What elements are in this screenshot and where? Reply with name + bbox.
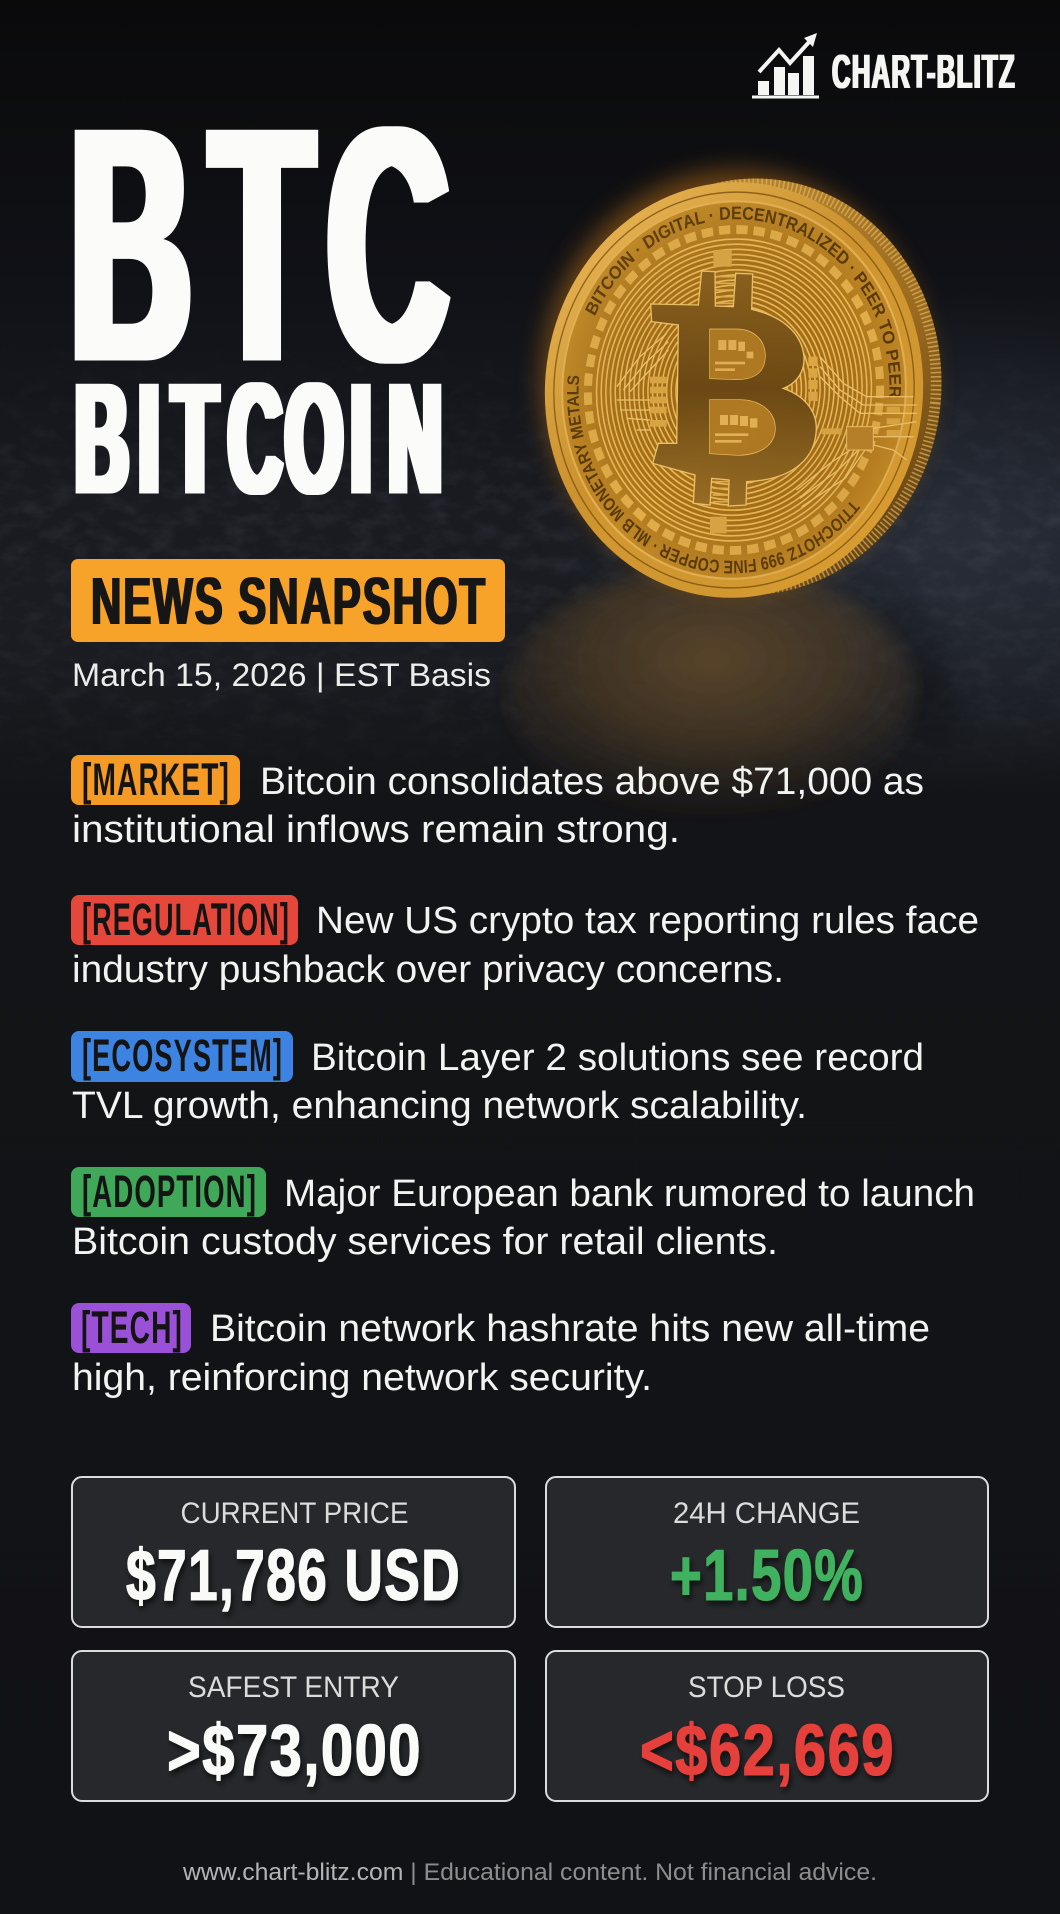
stat card: current price xyxy=(72,1477,515,1627)
ladder detail between bars xyxy=(713,277,735,502)
adoption headline: Bitcoin custody services for retail clients. xyxy=(72,1221,778,1263)
tech headline: high, reinforcing network security. xyxy=(72,1357,652,1399)
news item: tech xyxy=(71,1302,941,1399)
date line: March 15, 2026 | EST Basis xyxy=(72,657,491,693)
coin inscription: BITCOIN · DIGITAL · DECENTRALIZED · PEER TO PEER xyxy=(585,206,901,398)
value: safest entry: >$73,000 xyxy=(167,1711,422,1791)
market headline: Bitcoin consolidates above $71,000 as xyxy=(260,761,924,803)
illustration: gold bitcoin coin xyxy=(528,156,946,602)
badge: News Snapshot xyxy=(71,559,505,642)
subtitle: BITCOIN: BITCOIN xyxy=(75,351,442,528)
tag: tech: [TECH] xyxy=(81,1302,183,1353)
coin glow xyxy=(542,170,932,590)
market headline: institutional inflows remain strong. xyxy=(72,809,680,851)
tag: market: [MARKET] xyxy=(82,754,230,805)
value: current price: $71,786 USD xyxy=(126,1536,461,1616)
adoption headline: Major European bank rumored to launch xyxy=(284,1173,975,1215)
tag: tech xyxy=(71,1302,191,1353)
label: safest entry: SAFEST ENTRY xyxy=(188,1671,399,1704)
news item: market xyxy=(71,754,935,851)
coin face xyxy=(544,182,924,598)
coin inscription lower: TTIOCHOTZ 999 FINE COPPER · MLB MONETARY METALS xyxy=(567,376,860,574)
stat card: safest entry xyxy=(72,1651,515,1801)
tag: market xyxy=(71,754,240,805)
logo: Chart-Blitz xyxy=(752,33,1016,99)
news item: adoption xyxy=(71,1166,986,1263)
tag: regulation: [REGULATION] xyxy=(82,894,290,945)
stat card: 24h change xyxy=(546,1477,988,1627)
tech headline: Bitcoin network hashrate hits new all-time xyxy=(210,1308,930,1350)
news item: ecosystem xyxy=(71,1030,935,1127)
tag: regulation xyxy=(71,894,298,945)
ecosystem headline: TVL growth, enhancing network scalability. xyxy=(72,1085,807,1127)
coin lighting xyxy=(528,167,940,613)
badge: News Snapshot: NEWS SNAPSHOT xyxy=(91,564,487,639)
stat card: stop loss xyxy=(546,1651,988,1801)
background: dark slate surface xyxy=(0,0,1060,808)
footer disclaimer: www.chart-blitz.com | Educational content. Not financial advice. xyxy=(182,1859,877,1886)
circuit traces xyxy=(617,333,917,507)
value: 24h change: +1.50% xyxy=(670,1536,864,1616)
label: stop loss: STOP LOSS xyxy=(688,1671,845,1704)
label: 24h change: 24H CHANGE xyxy=(673,1497,860,1530)
tag: adoption xyxy=(71,1166,266,1217)
coin edge xyxy=(547,163,959,611)
tag: ecosystem: [ECOSYSTEM] xyxy=(82,1030,283,1081)
circuit pads and chips xyxy=(650,250,900,533)
news item: regulation xyxy=(71,894,990,991)
title: BTC: BTC xyxy=(70,58,448,431)
icon: rising bar chart with arrow xyxy=(752,33,819,98)
label: current price: CURRENT PRICE xyxy=(180,1497,408,1530)
value: stop loss: <$62,669 xyxy=(640,1711,895,1791)
ecosystem headline: Bitcoin Layer 2 solutions see record xyxy=(311,1037,924,1079)
tag: adoption: [ADOPTION] xyxy=(82,1166,257,1217)
regulation headline: industry pushback over privacy concerns. xyxy=(72,949,784,991)
tag: ecosystem xyxy=(71,1030,293,1082)
bitcoin symbol xyxy=(651,271,816,506)
regulation headline: New US crypto tax reporting rules face xyxy=(316,900,979,942)
